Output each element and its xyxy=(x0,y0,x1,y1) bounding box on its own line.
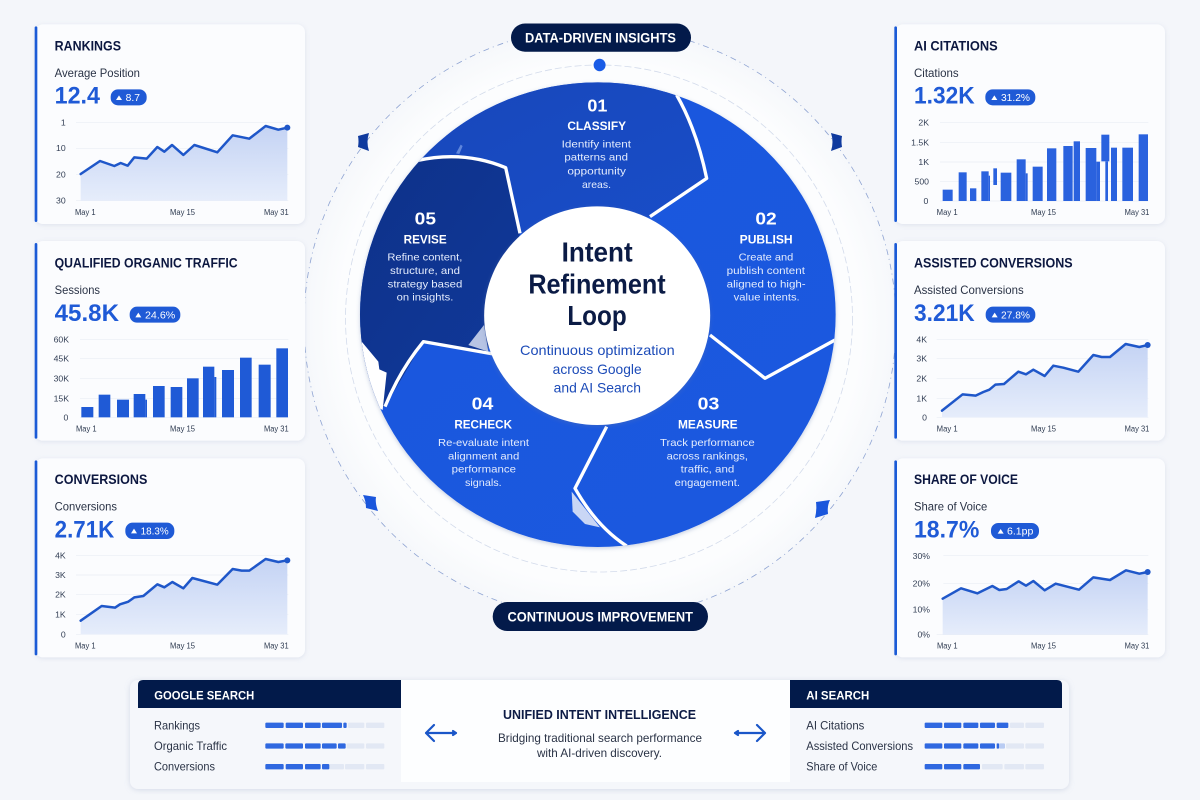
segment 02 and base xyxy=(360,82,836,547)
google search block: GOOGLE SEARCH xyxy=(154,688,254,702)
bar chart: 45K xyxy=(54,354,69,364)
panel: share of voice: 18.7% xyxy=(914,517,979,544)
bar chart: 0 xyxy=(64,412,69,422)
badge: 18.3% xyxy=(141,526,169,537)
bottom pill xyxy=(493,602,708,631)
badge: 8.7 xyxy=(126,93,140,104)
area chart: May 31 xyxy=(1125,424,1150,434)
bar chart: May 31 xyxy=(264,424,289,434)
bar chart: 60K xyxy=(54,334,69,344)
top pill xyxy=(511,24,691,52)
panel: ai citations: 1.32K xyxy=(914,83,975,110)
segment 01 xyxy=(421,82,705,234)
panel: qualified organic traffic xyxy=(35,241,305,441)
center subtitle: Continuous optimization xyxy=(520,342,675,358)
area chart: 0 xyxy=(922,412,927,422)
area chart: May 31 xyxy=(1125,641,1150,651)
area chart: May 15 xyxy=(170,641,195,651)
panel: conversions: CONVERSIONS xyxy=(55,471,147,487)
badge: 24.6% xyxy=(145,310,175,321)
diamond markers xyxy=(358,133,842,518)
panel: ai citations xyxy=(894,24,1165,224)
area chart: 4K xyxy=(55,550,66,560)
segment 03 text: Track performance xyxy=(660,438,755,449)
segment 03 text: engagement. xyxy=(675,478,740,489)
area chart: 30 xyxy=(56,196,66,206)
panel: assisted conversions: ASSISTED CONVERSIONS xyxy=(914,255,1073,271)
segment 05 xyxy=(360,158,520,407)
bar chart: 2K xyxy=(918,118,929,128)
area chart: 3K xyxy=(55,570,66,580)
badge xyxy=(125,523,174,539)
area chart: 10% xyxy=(913,604,930,614)
segment 02 text: PUBLISH xyxy=(740,233,793,246)
panel: rankings: RANKINGS xyxy=(55,37,121,53)
segment 01 text: patterns and xyxy=(564,153,628,164)
segment 05 text: REVISE xyxy=(404,233,447,246)
inner dashed ring xyxy=(346,65,852,572)
panel: conversions xyxy=(35,458,305,657)
bar chart: 15K xyxy=(54,393,69,403)
segment 02 text: Create and xyxy=(739,253,794,264)
panel: conversions: Conversions xyxy=(55,500,117,513)
badge: 27.8% xyxy=(1001,310,1030,321)
segment 01 text: opportunity xyxy=(567,166,627,177)
panel: assisted conversions xyxy=(894,241,1165,441)
panel: share of voice: Share of Voice xyxy=(914,500,987,513)
center circle xyxy=(484,206,710,425)
segment 01 text xyxy=(562,95,631,191)
panel: rankings: 12.4 xyxy=(55,83,101,110)
bar chart: 1.5K xyxy=(911,137,929,147)
area chart: 20 xyxy=(56,169,66,179)
segment 01 text: areas. xyxy=(582,180,611,191)
area chart: 3K xyxy=(916,354,927,364)
area chart: May 15 xyxy=(170,207,195,217)
area chart: May 1 xyxy=(75,207,96,217)
area chart: 1 xyxy=(61,117,66,127)
panel: ai citations: AI CITATIONS xyxy=(914,37,998,53)
segment 03 text: MEASURE xyxy=(678,419,738,432)
ai search block: AI Citations xyxy=(806,718,864,732)
segment 03 text xyxy=(660,394,755,489)
segment 01 text: 01 xyxy=(587,95,607,115)
segment 04 text: signals. xyxy=(465,478,502,489)
area chart: 0 xyxy=(61,629,66,639)
area chart: 10 xyxy=(56,143,66,153)
loop diagram xyxy=(358,82,838,550)
area chart: May 1 xyxy=(75,641,96,651)
segment 03 text: traffic, and xyxy=(681,465,735,476)
area chart: 20% xyxy=(913,579,930,589)
bar chart: May 15 xyxy=(1031,207,1056,217)
badge: 31.2% xyxy=(1001,93,1030,104)
bar chart: 500 xyxy=(915,177,929,187)
center subtitle xyxy=(520,342,675,395)
bar chart xyxy=(54,334,289,434)
segment 04 text: 04 xyxy=(472,394,493,414)
center block: with AI-driven discovery. xyxy=(536,746,662,760)
badge: 6.1pp xyxy=(1007,526,1034,537)
center title: Refinement xyxy=(528,268,666,299)
google search block xyxy=(138,680,401,774)
center subtitle: across Google xyxy=(553,361,642,377)
panel: qualified organic traffic: QUALIFIED ORGANIC TRAFFIC xyxy=(55,255,238,271)
panel: share of voice xyxy=(894,458,1165,657)
arrow: right xyxy=(735,725,765,741)
panel: conversions: 2.71K xyxy=(55,517,115,544)
segment 05 text: on insights. xyxy=(397,293,453,304)
bar chart: 30K xyxy=(54,374,69,384)
area chart: May 15 xyxy=(1031,641,1056,651)
panel: bottom comparison xyxy=(130,680,1069,789)
area chart xyxy=(913,551,1151,651)
background glow xyxy=(304,27,896,619)
segment 03 text: across rankings, xyxy=(667,451,748,462)
center block xyxy=(401,680,790,782)
segment artifacts xyxy=(360,145,600,527)
bar chart: 1K xyxy=(918,157,929,167)
segment 04 text: performance xyxy=(452,465,516,476)
area chart: May 15 xyxy=(1031,424,1056,434)
area chart: 1K xyxy=(916,393,927,403)
segment 02 text: value intents. xyxy=(734,293,800,304)
segment 05 text: 05 xyxy=(415,208,436,228)
center block: UNIFIED INTENT INTELLIGENCE xyxy=(503,707,696,722)
area chart: 1K xyxy=(55,610,66,620)
area chart: May 1 xyxy=(937,641,958,651)
area chart: May 31 xyxy=(264,641,289,651)
top pill: DATA-DRIVEN INSIGHTS xyxy=(525,30,676,45)
panel: assisted conversions: 3.21K xyxy=(914,300,975,327)
center title: Intent xyxy=(562,237,633,268)
outer dashed ring xyxy=(304,27,896,619)
segment 05 text xyxy=(387,208,463,304)
center title xyxy=(528,237,666,331)
segment 03 text: 03 xyxy=(698,394,719,414)
bar chart: May 31 xyxy=(1125,207,1150,217)
arrow: left xyxy=(426,725,456,741)
panel: share of voice: SHARE OF VOICE xyxy=(914,471,1018,487)
segment 02 text xyxy=(727,208,806,304)
segment 02 text: 02 xyxy=(755,208,777,228)
bar chart: 0 xyxy=(924,196,929,206)
badge xyxy=(111,89,147,105)
area chart: 0% xyxy=(917,630,930,640)
segment 01 text: CLASSIFY xyxy=(567,120,626,133)
google search block: Organic Traffic xyxy=(154,739,227,753)
area chart: May 1 xyxy=(937,424,958,434)
ai search block: Assisted Conversions xyxy=(806,739,913,753)
center title: Loop xyxy=(567,300,627,331)
google search block: Rankings xyxy=(154,718,200,732)
segment 05 text: Refine content, xyxy=(387,253,462,264)
area chart: 2K xyxy=(916,374,927,384)
area chart xyxy=(56,117,290,217)
bar chart: May 15 xyxy=(170,424,195,434)
badge xyxy=(985,89,1035,105)
badge xyxy=(986,307,1035,323)
panel: ai citations: Citations xyxy=(914,67,959,80)
segment 05 text: strategy based xyxy=(388,279,463,290)
badge xyxy=(991,523,1039,539)
bar chart: May 1 xyxy=(937,207,958,217)
panel: qualified organic traffic: Sessions xyxy=(55,284,100,297)
segment dividers xyxy=(385,95,835,546)
area chart: 2K xyxy=(55,590,66,600)
badge xyxy=(130,307,180,323)
area chart xyxy=(916,334,1151,434)
ai search block xyxy=(790,680,1062,774)
area chart: 4K xyxy=(916,334,927,344)
ai search block: AI SEARCH xyxy=(806,688,869,702)
panel: rankings: Average Position xyxy=(55,67,140,80)
segment 04 text xyxy=(438,394,529,489)
segment 04 text: Re-evaluate intent xyxy=(438,438,529,449)
area chart xyxy=(55,550,290,651)
ai search block: Share of Voice xyxy=(806,760,878,774)
bar chart: May 1 xyxy=(76,424,97,434)
panel: assisted conversions: Assisted Conversions xyxy=(914,284,1024,297)
segment 02 text: aligned to high- xyxy=(727,279,806,290)
segment 05 text: structure, and xyxy=(390,266,460,277)
panel: rankings xyxy=(35,24,305,224)
area chart: May 31 xyxy=(264,207,289,217)
segment 02 text: publish content xyxy=(727,266,805,277)
segment 04 text: alignment and xyxy=(448,451,520,462)
segment 04 text: RECHECK xyxy=(454,419,513,432)
bottom pill: CONTINUOUS IMPROVEMENT xyxy=(508,610,694,625)
center subtitle: and AI Search xyxy=(554,379,641,395)
bar chart xyxy=(911,118,1150,217)
area chart: 30% xyxy=(913,551,930,561)
center block: Bridging traditional search performance xyxy=(498,731,702,745)
panel: qualified organic traffic: 45.8K xyxy=(55,300,120,327)
ring dot xyxy=(594,59,606,71)
google search block: Conversions xyxy=(154,760,215,774)
segment 01 text: Identify intent xyxy=(562,139,631,150)
